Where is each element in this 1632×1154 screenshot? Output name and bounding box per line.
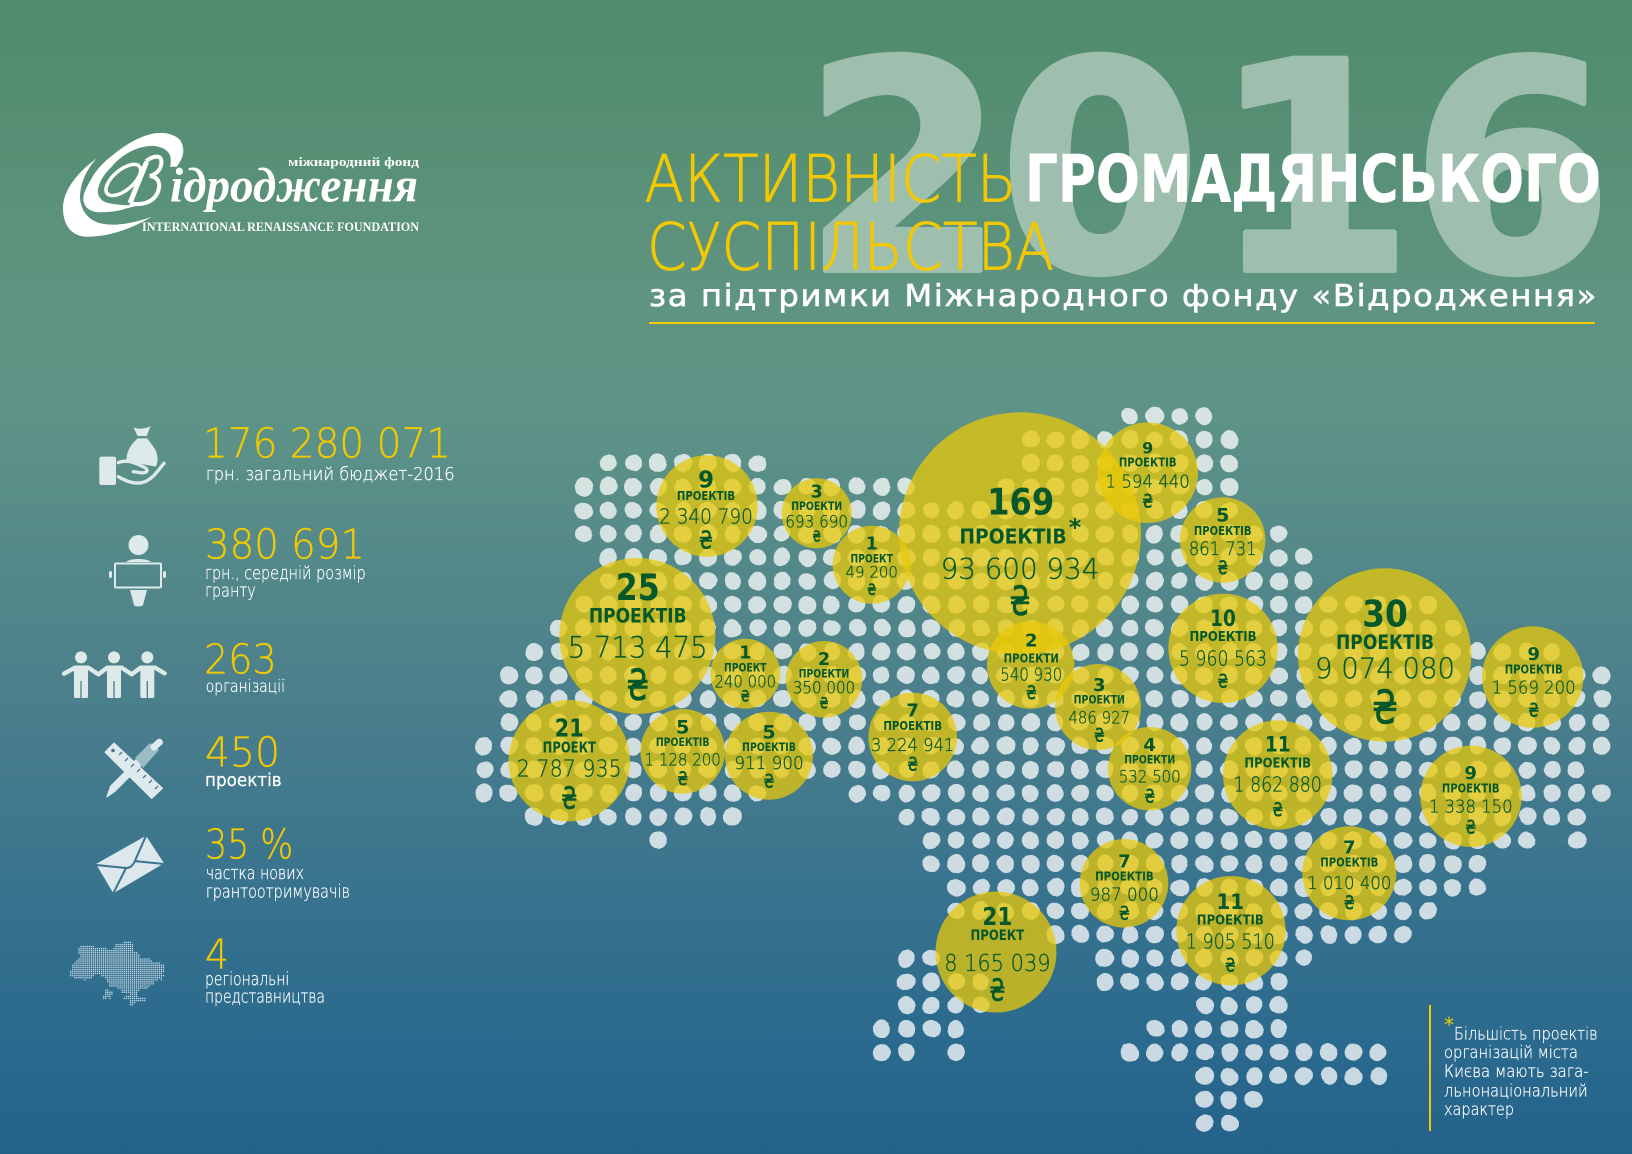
bubble: 9 projects, 2 340 790: ПРОЕКТІВ xyxy=(677,488,735,503)
bubble: 7 projects, 3 224 941: ₴ xyxy=(907,754,918,776)
bubble: 9 projects, 1 594 440: 1 594 440 xyxy=(1106,471,1190,492)
icon: ruler and pencil xyxy=(104,737,164,799)
bubble: 5 projects, 911 900: ПРОЕКТІВ xyxy=(742,740,796,754)
bubble: 2 projects, 350 000 xyxy=(786,641,862,718)
bubble: 10 projects, 5 960 563: 5 960 563 xyxy=(1179,647,1267,671)
bubble: 10 projects, 5 960 563: 10 xyxy=(1210,607,1236,632)
bubble: 25 projects, 5 713 475: 5 713 475 xyxy=(568,630,708,664)
bubble: 7 projects, 1 010 400: ₴ xyxy=(1344,892,1355,914)
bubble: 5 projects, 911 900: ₴ xyxy=(764,770,774,792)
bubble: 11 projects, 1 862 880: 11 xyxy=(1265,733,1291,758)
footnote: характер xyxy=(1444,1100,1514,1119)
bubble: 10 projects, 5 960 563: ₴ xyxy=(1218,670,1228,692)
bubble: 7 projects, 1 010 400: ПРОЕКТІВ xyxy=(1320,855,1378,870)
stat: average grant: 380 691 xyxy=(205,520,365,568)
bubble: 3 projects, 486 927: ₴ xyxy=(1094,725,1105,747)
bubble: 10 projects, 5 960 563 xyxy=(1168,594,1278,703)
bubble: 9 projects, 1 594 440: ПРОЕКТІВ xyxy=(1119,455,1177,470)
stat: total budget: 176 280 071 xyxy=(203,419,451,467)
bubble: 11 projects, 1 905 510: 11 xyxy=(1216,890,1244,915)
bubble: 21 projects, 2 787 935: 21 xyxy=(555,714,584,743)
stat: regional offices: 4 xyxy=(205,930,229,978)
bubble: 3 projects, 693 690 xyxy=(782,478,852,548)
bubble: 5 projects, 861 731 xyxy=(1180,497,1265,583)
bubble: 1 project, 49 200: ПРОЕКТ xyxy=(851,551,893,565)
bubble: 7 projects, 987 000: ПРОЕКТІВ xyxy=(1095,869,1154,884)
bubble: 30 projects, 9 074 080: 9 074 080 xyxy=(1315,652,1455,685)
bubble: 11 projects, 1 905 510: ₴ xyxy=(1225,955,1236,977)
bubble: 4 projects, 532 500: 532 500 xyxy=(1119,767,1181,787)
stat: average grant: грн., середній розмір xyxy=(205,564,366,584)
bubble: 7 projects, 987 000: ₴ xyxy=(1119,902,1130,924)
stat: new grantees: 35 % xyxy=(205,820,293,868)
bubble: 9 projects, 1 338 150: ПРОЕКТІВ xyxy=(1442,780,1500,795)
bubble: 1 project, 49 200: 1 xyxy=(866,534,878,554)
footnote xyxy=(1429,1005,1598,1131)
title: СУСПІЛЬСТВА xyxy=(647,210,1054,285)
bubble: 9 projects, 2 340 790: ₴ xyxy=(699,525,713,554)
bubble: 11 projects, 1 905 510 xyxy=(1176,876,1286,985)
stat: new grantees: грантоотримувачів xyxy=(206,882,350,902)
bubble: 9 projects, 1 569 200: 1 569 200 xyxy=(1492,677,1576,698)
bubble: 11 projects, 1 905 510: ПРОЕКТІВ xyxy=(1197,912,1264,928)
dotted map of Ukraine xyxy=(484,416,1602,1123)
icon: money bag in hand xyxy=(99,426,164,485)
bubble: 30 projects, 9 074 080: ₴ xyxy=(1372,680,1398,734)
bubble: 5 projects, 1 128 200: 1 128 200 xyxy=(645,751,721,771)
bubble: 9 projects, 1 594 440: ₴ xyxy=(1142,490,1153,512)
bubble: 5 projects, 911 900: 911 900 xyxy=(734,753,804,774)
bubble: 9 projects, 1 569 200: ПРОЕКТІВ xyxy=(1505,661,1563,676)
bubble: 169 projects (Kyiv): ₴ xyxy=(1010,579,1030,625)
bubble: 30 projects, 9 074 080: ПРОЕКТІВ xyxy=(1336,631,1434,654)
bubble: 11 projects, 1 905 510: 1 905 510 xyxy=(1186,929,1275,953)
bubble: 169 projects (Kyiv): * xyxy=(1069,514,1082,542)
big year 2016: 6 xyxy=(1411,2,1613,339)
bubble: 5 projects, 1 128 200: ПРОЕКТІВ xyxy=(656,735,710,749)
stat: projects: проектів xyxy=(205,770,282,791)
icon: three people holding hands xyxy=(64,651,165,698)
bubble: 9 projects, 2 340 790: 2 340 790 xyxy=(659,504,753,528)
bubble: 7 projects, 3 224 941: 3 224 941 xyxy=(871,736,954,756)
bubble: 2 projects, 350 000: ₴ xyxy=(820,693,828,712)
stat: regional offices: представництва xyxy=(205,988,325,1008)
bubble: 4 projects, 532 500: ₴ xyxy=(1144,785,1155,807)
bubble: 169 projects (Kyiv): 93 600 934 xyxy=(941,553,1099,586)
bubble: 1 project, 49 200 xyxy=(833,526,911,604)
bubble: 21 projects, 2 787 935: 2 787 935 xyxy=(517,757,622,783)
bubble: 2 projects, 540 930: 2 xyxy=(1025,631,1038,652)
bubble: 11 projects, 1 862 880: ₴ xyxy=(1272,799,1283,821)
bubble: 3 projects, 486 927: 486 927 xyxy=(1068,708,1130,728)
icon: envelope xyxy=(96,836,164,893)
bubble: 169 projects (Kyiv): 169 xyxy=(987,480,1054,523)
bubble: 4 projects, 532 500: 4 xyxy=(1143,735,1156,756)
bubble: 25 projects, 5 713 475: 25 xyxy=(616,566,660,609)
bubble: 5 projects, 861 731: 5 xyxy=(1216,505,1229,527)
bubble: 7 projects, 987 000: 987 000 xyxy=(1090,885,1159,906)
bubble: 21 projects, 8 165 039: 21 xyxy=(982,902,1012,931)
bubble: 30 projects, 9 074 080 xyxy=(1298,568,1471,742)
bubble: 2 projects, 540 930 xyxy=(987,621,1074,709)
stat: organisations xyxy=(64,635,285,698)
bubble: 25 projects, 5 713 475 xyxy=(559,558,715,714)
bubble: 10 projects, 5 960 563: ПРОЕКТІВ xyxy=(1190,629,1256,645)
bubble: 9 projects, 1 569 200 xyxy=(1482,626,1583,728)
bubble: 2 projects, 350 000: ПРОЕКТИ xyxy=(799,666,849,680)
logo: International Renaissance Foundation: INTERNATIONAL RENAISSANCE FOUNDATION xyxy=(142,220,419,234)
stat: organisations: 263 xyxy=(204,635,277,683)
bubble: 9 projects, 1 569 200: 9 xyxy=(1527,644,1540,665)
bubble: 7 projects, 3 224 941: ПРОЕКТІВ xyxy=(883,718,942,733)
footnote: льнонаціональний xyxy=(1444,1082,1588,1101)
bubble: 4 projects, 532 500: ПРОЕКТИ xyxy=(1124,752,1175,766)
stat: regional offices xyxy=(71,930,325,1008)
stat: total budget: грн. загальний бюджет-2016 xyxy=(206,464,455,485)
bubble: 5 projects, 1 128 200: ₴ xyxy=(677,768,688,790)
bubble: 3 projects, 486 927 xyxy=(1055,664,1141,750)
icon: person with board xyxy=(109,535,166,606)
bubble: 21 projects, 8 165 039: ПРОЕКТ xyxy=(971,928,1025,944)
bubble: 21 projects, 2 787 935: ПРОЕКТ xyxy=(543,739,596,756)
bubble: 5 projects, 911 900: 5 xyxy=(762,721,776,743)
footnote: організацій міста xyxy=(1444,1043,1578,1062)
bubble: 21 projects, 8 165 039: 8 165 039 xyxy=(944,951,1051,977)
footnote: Більшість проектів xyxy=(1454,1024,1598,1043)
bubble: 1 project, 240 000: 240 000 xyxy=(714,672,776,692)
bubble: 5 projects, 911 900 xyxy=(725,712,813,800)
bubble: 9 projects, 1 338 150: 1 338 150 xyxy=(1429,796,1513,817)
bubble: 1 project, 240 000: ПРОЕКТ xyxy=(724,661,767,675)
bubble: 4 projects, 532 500 xyxy=(1108,727,1191,810)
footnote: * xyxy=(1444,1013,1454,1037)
stat: regional offices: регіональні xyxy=(205,970,289,990)
stat: total budget xyxy=(99,419,455,485)
bubble: 7 projects, 987 000 xyxy=(1080,839,1168,928)
bubble: 169 projects (Kyiv): ПРОЕКТІВ xyxy=(959,524,1067,548)
bubble: 9 projects, 1 338 150 xyxy=(1420,746,1522,847)
bubble: 9 projects, 1 338 150: ₴ xyxy=(1465,816,1476,838)
bubble: 7 projects, 1 010 400 xyxy=(1302,826,1396,920)
bubble: 9 projects, 1 594 440 xyxy=(1097,422,1198,523)
stat: average grant xyxy=(109,520,366,606)
bubble: 1 project, 240 000 xyxy=(710,639,780,709)
logo: International Renaissance Foundation: міжнародний фонд xyxy=(288,154,419,169)
stat: average grant: гранту xyxy=(205,582,256,602)
bubble: 2 projects, 350 000: 2 xyxy=(818,650,830,670)
bubble: 3 projects, 486 927: 3 xyxy=(1093,675,1106,696)
logo: International Renaissance Foundation xyxy=(63,133,419,237)
stat: new grantees: частка нових xyxy=(206,864,304,884)
footnote: Києва мають зага- xyxy=(1444,1062,1589,1081)
bubble: 7 projects, 1 010 400: 1 010 400 xyxy=(1307,873,1391,894)
bubble: 21 projects, 8 165 039: ₴ xyxy=(989,974,1005,1009)
bubble: 21 projects, 8 165 039 xyxy=(936,892,1056,1012)
bubble: 25 projects, 5 713 475: ₴ xyxy=(626,661,649,711)
bubble: 2 projects, 350 000: 350 000 xyxy=(793,678,855,698)
bubble: 9 projects, 2 340 790 xyxy=(656,455,758,557)
bubble: 11 projects, 1 862 880 xyxy=(1223,720,1332,830)
bubble: 3 projects, 693 690: ПРОЕКТИ xyxy=(791,499,842,513)
subtitle: за підтримки Міжнародного фонду «Відродження» xyxy=(649,279,1598,314)
bubble: 1 project, 240 000: 1 xyxy=(739,643,751,663)
bubble: 1 project, 240 000: ₴ xyxy=(741,687,750,706)
bubble: 3 projects, 693 690: 693 690 xyxy=(785,512,848,532)
big year 2016: 1 xyxy=(1212,2,1414,339)
bubble: 21 projects, 2 787 935: ₴ xyxy=(561,781,577,816)
stat: projects: 450 xyxy=(205,729,280,777)
bubble: 7 projects, 987 000: 7 xyxy=(1118,851,1131,872)
bubble: 7 projects, 3 224 941: 7 xyxy=(906,701,919,722)
bubble: 25 projects, 5 713 475: ПРОЕКТІВ xyxy=(589,605,687,628)
bubble: 3 projects, 693 690: ₴ xyxy=(812,528,821,546)
bubble: 5 projects, 861 731: ПРОЕКТІВ xyxy=(1194,523,1252,538)
bubble: 21 projects, 2 787 935 xyxy=(509,700,630,821)
bubble: 1 project, 49 200: ₴ xyxy=(867,580,876,599)
bubble: 9 projects, 1 338 150: 9 xyxy=(1464,763,1477,784)
logo: International Renaissance Foundation: ідродження xyxy=(170,158,418,212)
bubble: 5 projects, 861 731: ₴ xyxy=(1217,557,1228,579)
big year 2016: 0 xyxy=(999,2,1201,339)
bubble: 5 projects, 1 128 200 xyxy=(640,709,725,794)
bubble: 3 projects, 486 927: ПРОЕКТИ xyxy=(1074,692,1125,706)
bubble: 2 projects, 540 930: 540 930 xyxy=(1000,665,1062,686)
stat: projects xyxy=(104,729,282,799)
bubble: 2 projects, 540 930: ПРОЕКТИ xyxy=(1004,650,1059,665)
stat: organisations: організації xyxy=(206,677,285,697)
bubble: 3 projects, 693 690: 3 xyxy=(811,483,823,503)
bubble: 2 projects, 540 930: ₴ xyxy=(1026,682,1037,704)
bubble: 11 projects, 1 862 880: ПРОЕКТІВ xyxy=(1244,755,1311,771)
title xyxy=(644,143,1601,285)
icon: dotted map of Ukraine xyxy=(71,942,164,1005)
bubble: 11 projects, 1 862 880: 1 862 880 xyxy=(1234,773,1322,797)
bubble: 30 projects, 9 074 080: 30 xyxy=(1362,593,1408,636)
bubble: 1 project, 49 200: 49 200 xyxy=(846,562,898,581)
stat: new grantees xyxy=(96,820,350,902)
bubble: 5 projects, 861 731: 861 731 xyxy=(1189,539,1257,560)
big year 2016: 2 xyxy=(803,2,1005,339)
bubble: 7 projects, 3 224 941 xyxy=(868,693,957,781)
bubble: 9 projects, 2 340 790: 9 xyxy=(698,467,714,493)
bubble: 9 projects, 1 569 200: ₴ xyxy=(1528,700,1539,722)
bubble: 9 projects, 1 594 440: 9 xyxy=(1142,438,1153,457)
bubble: 5 projects, 1 128 200: 5 xyxy=(676,716,689,738)
bubble: 7 projects, 1 010 400: 7 xyxy=(1343,837,1356,858)
bubble: 169 projects (Kyiv) xyxy=(899,412,1141,654)
title: АКТИВНІСТЬ xyxy=(644,143,1016,218)
